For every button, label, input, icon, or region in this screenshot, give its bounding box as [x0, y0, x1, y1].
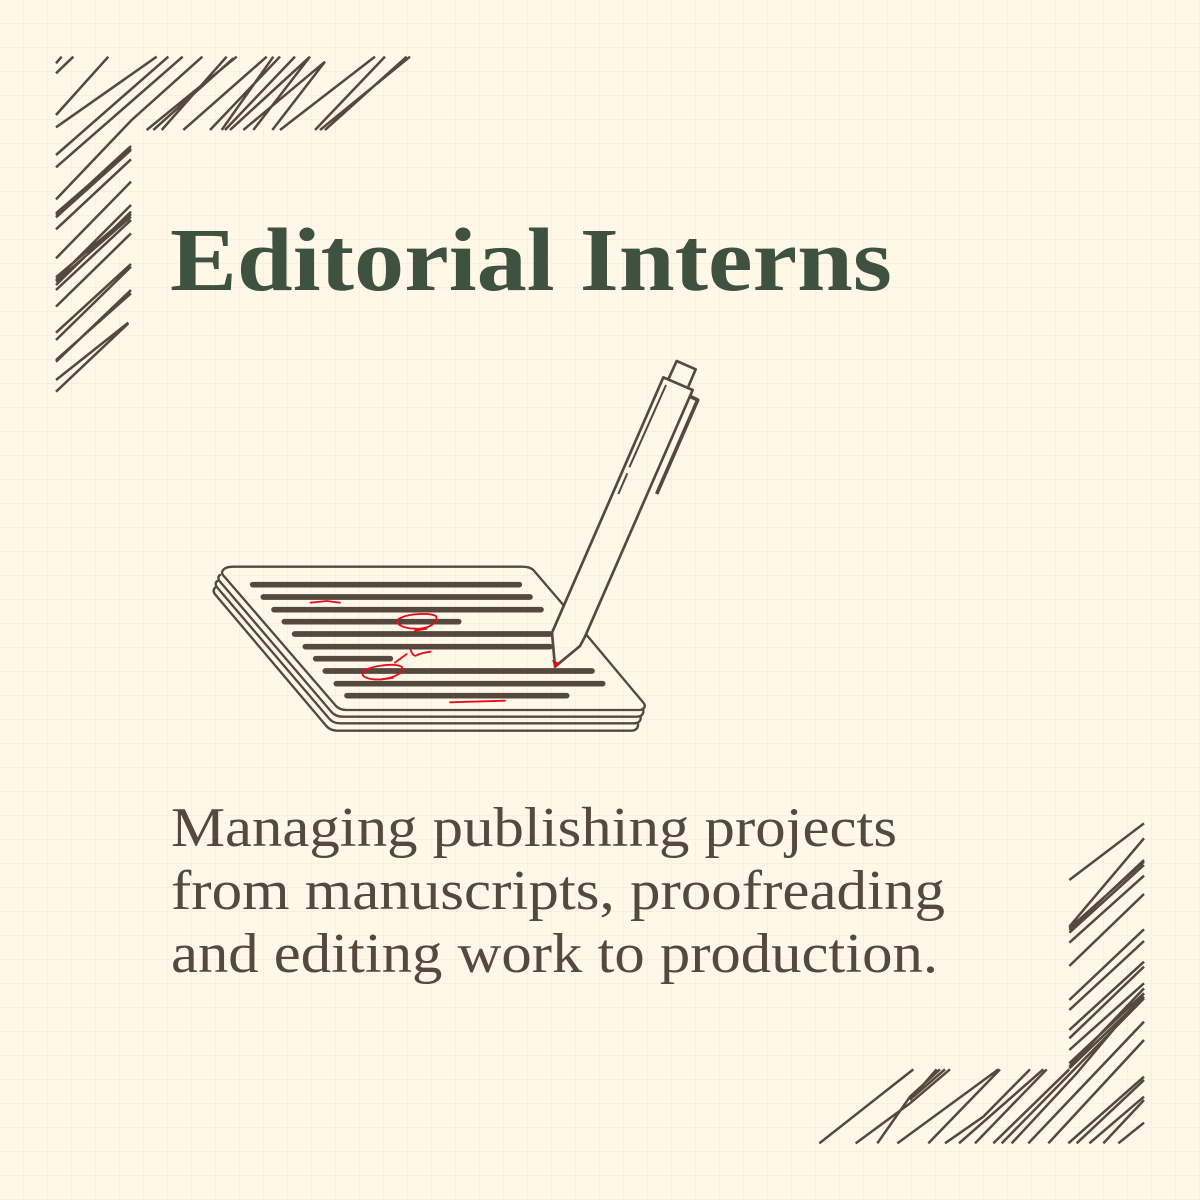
description text: and editing work to production. [171, 923, 938, 985]
description text: from manuscripts, proofreading [171, 860, 945, 922]
scribble frame: top-left corner [56, 57, 410, 392]
icon: pen [552, 361, 698, 668]
scribble frame: bottom-right corner [819, 823, 1144, 1143]
description text [171, 797, 945, 985]
red proofreading marks [311, 601, 505, 702]
manuscript text lines [253, 585, 603, 696]
title: Editorial Interns [170, 211, 892, 310]
illustration: manuscript with pen [214, 361, 698, 731]
icon: paper stack [214, 567, 645, 731]
description text: Managing publishing projects [171, 797, 897, 859]
